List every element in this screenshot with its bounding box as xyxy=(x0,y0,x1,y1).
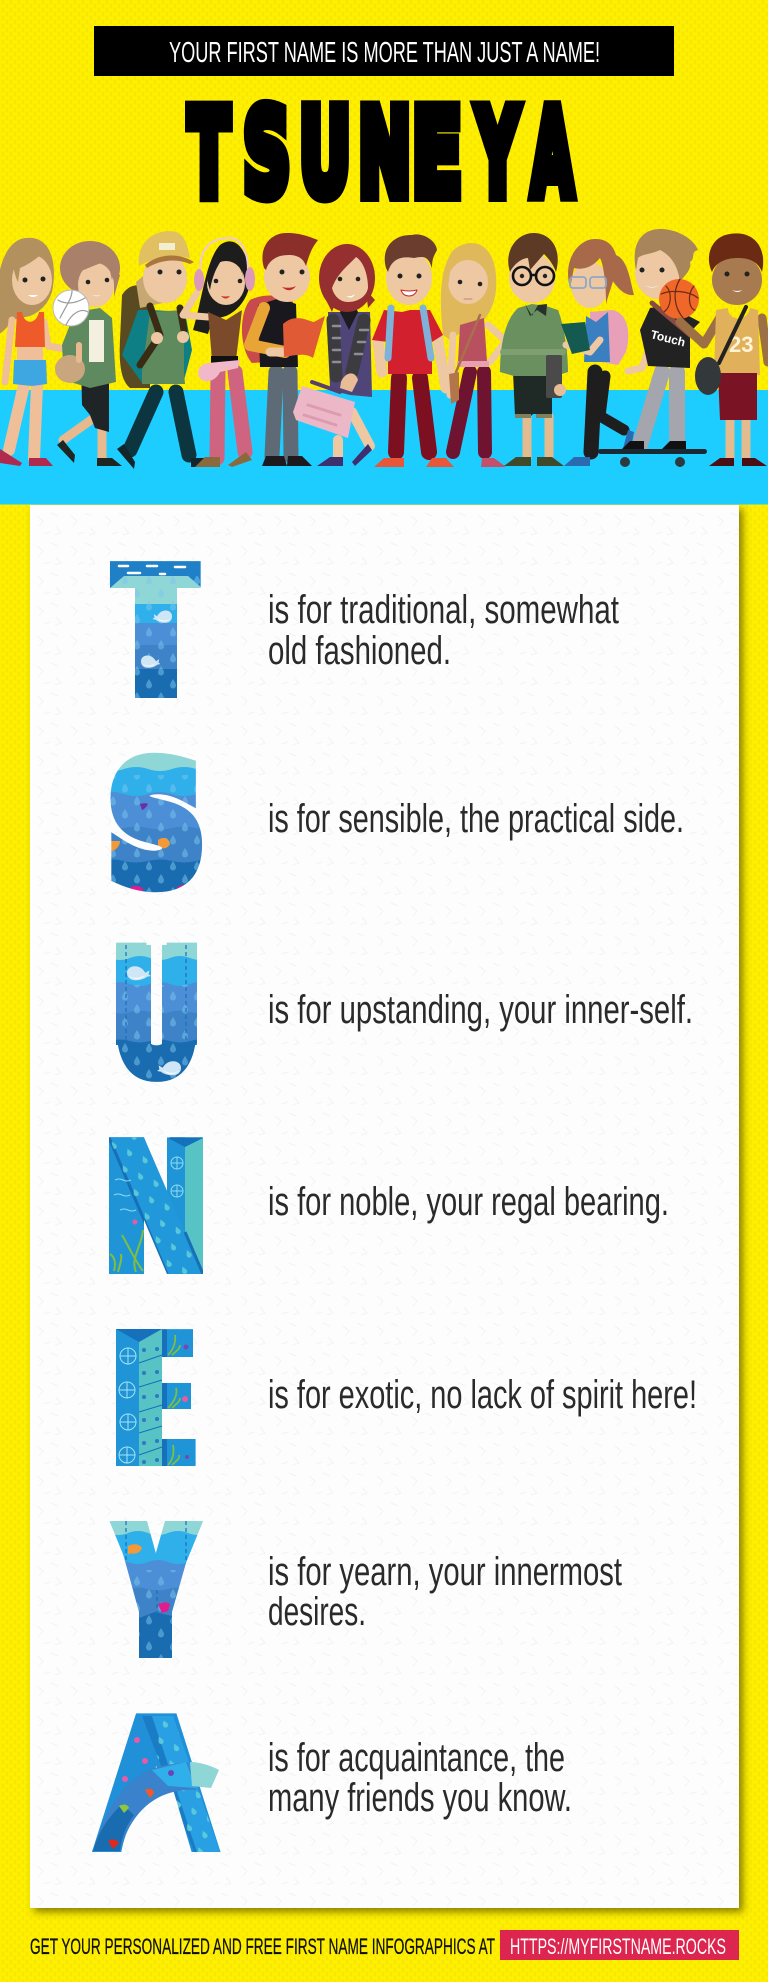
letter N illustration xyxy=(109,1137,203,1274)
description: Y: is for yearn, your innermost xyxy=(268,1550,622,1594)
title: S xyxy=(243,86,290,224)
letter E illustration xyxy=(116,1329,196,1466)
title: U xyxy=(299,86,351,224)
title: N xyxy=(358,86,411,224)
person 12: boy in tank top with shoulder bag xyxy=(680,233,768,466)
letter Y illustration xyxy=(110,1521,203,1658)
description: T: old fashioned. xyxy=(268,629,451,673)
person 7: boy in red shirt xyxy=(372,234,454,467)
person 12: boy in tank top with shoulder bag: 23 xyxy=(729,332,753,357)
description: Y: desires. xyxy=(268,1590,366,1634)
person 2: girl with volleyball xyxy=(53,241,122,466)
person 9: boy with glasses and laptop xyxy=(500,233,568,466)
description: T xyxy=(268,588,619,673)
text: A xyxy=(531,86,573,224)
title: Y xyxy=(476,86,519,224)
person 8: blonde girl xyxy=(441,243,506,467)
letter U illustration xyxy=(116,942,198,1082)
person 10: girl with ponytail and tablet xyxy=(561,239,634,466)
header banner xyxy=(94,26,674,76)
description: A: many friends you know. xyxy=(268,1776,572,1820)
blue floor band xyxy=(0,390,768,504)
person 3: boy with cap and backpack xyxy=(117,231,208,469)
white content card xyxy=(30,505,739,1908)
description: Y xyxy=(268,1550,622,1634)
person 11: boy on skateboard with basketball: Touch xyxy=(649,327,687,349)
title: T xyxy=(188,86,230,224)
letter A illustration xyxy=(92,1713,220,1852)
group of students illustration xyxy=(0,229,768,469)
person 1: girl in orange top xyxy=(0,238,82,466)
letter T illustration xyxy=(110,561,201,698)
person 6: girl with red bob and pink bag xyxy=(293,244,375,466)
person 4: girl with headphones xyxy=(183,238,255,467)
description: A xyxy=(268,1736,572,1820)
letter S illustration xyxy=(110,752,202,892)
title: E xyxy=(412,86,462,224)
description: A: is for acquaintance, the xyxy=(268,1736,565,1780)
person 5: boy reading a book xyxy=(242,233,325,466)
footer call to action: GET YOUR PERSONALIZED AND FREE FIRST NAME INFOGRAPHICS AT xyxy=(30,1934,495,1959)
description: T: is for traditional, somewhat xyxy=(268,588,619,632)
person 11: boy on skateboard with basketball xyxy=(598,229,707,467)
